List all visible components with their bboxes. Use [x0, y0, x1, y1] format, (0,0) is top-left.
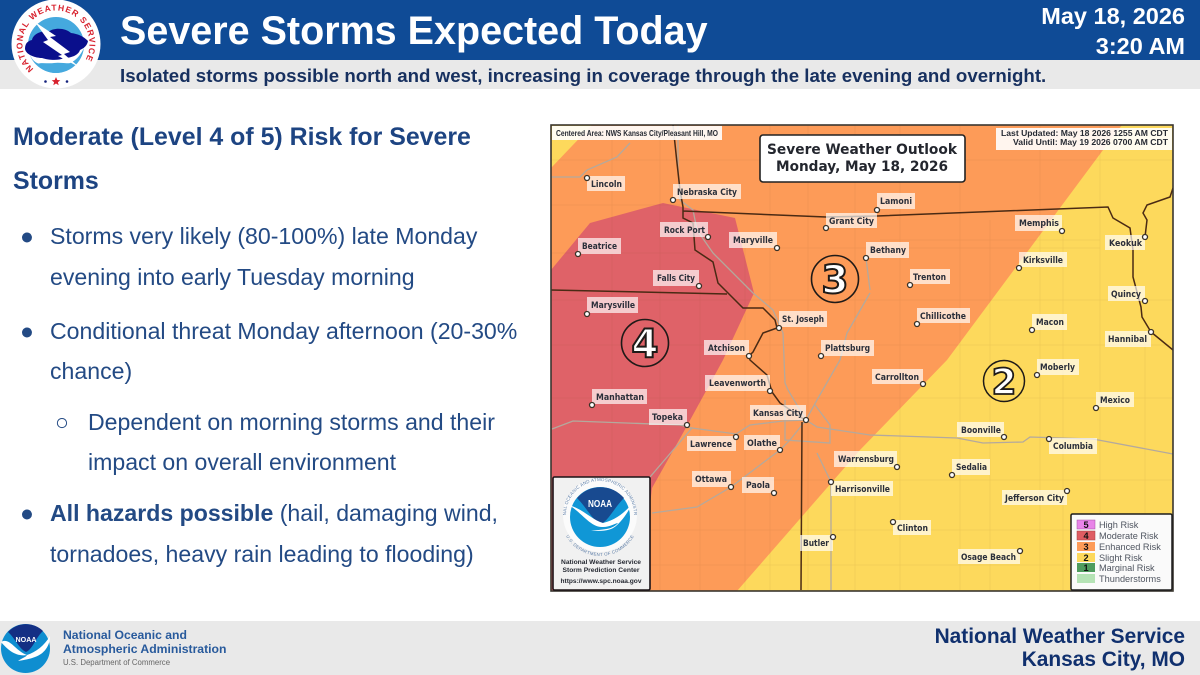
- city: Columbia: Columbia: [1053, 441, 1093, 452]
- NOAA panel on map: https://www.spc.noaa.gov: [560, 579, 642, 585]
- risk number 3: [812, 256, 858, 303]
- city: Memphis: Memphis: [1019, 218, 1059, 229]
- legend: Moderate Risk: [1099, 531, 1159, 541]
- legend: 1: [1083, 563, 1089, 573]
- bullet: conditional threat: [20, 318, 517, 384]
- bullet: storms likely: [20, 223, 478, 290]
- city: Plattsburg: [818, 340, 874, 358]
- bullet: storms likely: Storms very likely (80-100%) late Monday: [50, 223, 477, 249]
- city: Mexico: Mexico: [1100, 395, 1130, 406]
- city: Carrollton: Carrollton: [875, 372, 919, 383]
- city: Topeka: Topeka: [652, 412, 683, 423]
- NOAA panel on map: Storm Prediction Center: [562, 568, 640, 574]
- city: Falls City: [653, 270, 702, 288]
- legend: Marginal Risk: [1099, 563, 1155, 573]
- legend: 3: [1083, 542, 1089, 552]
- footer band: [0, 621, 1200, 675]
- city: Leavenworth: Leavenworth: [709, 378, 766, 389]
- city: Kirksville: [1016, 252, 1067, 270]
- city: Paola: [742, 477, 776, 496]
- icon: NOAA footer logo: [1, 624, 50, 673]
- map: severe weather outlook: [550, 124, 1174, 592]
- bullet: storms likely: ●: [20, 223, 34, 249]
- city: St. Joseph: [776, 311, 827, 330]
- NOAA panel on map: National Weather Service: [561, 560, 642, 566]
- yellow slight risk area NW: [551, 125, 592, 168]
- header band: [0, 0, 1200, 60]
- city: Quincy: Quincy: [1111, 289, 1141, 300]
- city: Olathe: Olathe: [747, 438, 777, 449]
- subtitle: Isolated storms possible north and west, increasing in coverage through the late evening and overnight.: [120, 65, 1046, 86]
- city: Keokuk: [1105, 234, 1148, 250]
- bullet: conditional threat: Conditional threat Monday afternoon (20-30%: [50, 318, 517, 344]
- city: Leavenworth: [705, 375, 772, 394]
- city: Beatrice: Beatrice: [582, 241, 617, 252]
- NOAA panel on map: NATIONAL OCEANIC AND ATMOSPHERIC ADMINISTRATION: [563, 478, 637, 515]
- NOAA panel on map: NOAA: [588, 499, 612, 510]
- bullet: conditional threat: ●: [20, 318, 34, 344]
- city: Memphis: [1015, 215, 1064, 234]
- city: Jefferson City: [1002, 488, 1070, 505]
- NOAA panel on map: [552, 476, 651, 591]
- date and time: May 18, 2026: [1041, 3, 1185, 29]
- date and time: [1041, 3, 1185, 59]
- NOAA wordmark: Atmospheric Administration: [63, 642, 226, 656]
- map title box: Severe Weather Outlook: [767, 142, 957, 158]
- city: Ottawa: [692, 471, 734, 490]
- city: Lawrence: [687, 434, 738, 451]
- city: Quincy: [1108, 286, 1148, 304]
- city: Marysville: Marysville: [591, 300, 635, 311]
- office name: National Weather Service: [935, 625, 1185, 648]
- city: Carrollton: [872, 369, 926, 386]
- label: centered area: Centered Area: NWS Kansas City/Pleasant Hill, MO: [556, 129, 718, 138]
- NOAA wordmark: [63, 628, 226, 667]
- city: Plattsburg: Plattsburg: [825, 343, 870, 354]
- bullet: all hazards: [20, 500, 498, 567]
- date and time: 3:20 AM: [1096, 33, 1185, 59]
- bullet: all hazards: tornadoes, heavy rain leading to flooding): [50, 541, 474, 567]
- risk number 2: [984, 360, 1024, 403]
- label: update times: [996, 128, 1172, 150]
- city: Marysville: [584, 297, 638, 316]
- city: Bethany: Bethany: [870, 245, 906, 256]
- office name: [935, 625, 1185, 671]
- slight risk area: [737, 125, 1173, 591]
- risk number 2: 2: [991, 362, 1017, 403]
- risk number 4: 4: [631, 322, 659, 367]
- city: Grant City: [824, 213, 877, 230]
- heading second line: Storms: [13, 167, 99, 195]
- city: Nebraska City: Nebraska City: [677, 187, 737, 198]
- city: Atchison: Atchison: [708, 343, 745, 354]
- sub-bullet: dependent: Dependent on morning storms and their: [88, 409, 495, 435]
- legend: 4: [1083, 531, 1089, 541]
- city: Osage Beach: [958, 548, 1022, 564]
- city: Hannibal: Hannibal: [1108, 334, 1147, 345]
- city: Moberly: [1034, 359, 1079, 378]
- city: Macon: [1030, 314, 1067, 332]
- city: St. Joseph: St. Joseph: [782, 314, 824, 325]
- city: Macon: Macon: [1036, 317, 1064, 328]
- city: Chillicothe: Chillicothe: [920, 311, 966, 322]
- city: Kansas City: [750, 405, 808, 422]
- city: Mexico: [1094, 392, 1134, 410]
- legend: [1071, 514, 1172, 590]
- city: Jefferson City: Jefferson City: [1004, 493, 1064, 504]
- legend: Slight Risk: [1099, 553, 1143, 563]
- city: Trenton: [908, 269, 950, 288]
- sub-bullet: dependent: ○: [55, 409, 69, 435]
- city: Boonville: Boonville: [961, 425, 1001, 436]
- NOAA wordmark: National Oceanic and: [63, 628, 187, 642]
- label: update times: Last Updated: May 18 2026 1255 AM CDT: [1001, 129, 1168, 138]
- city: Maryville: Maryville: [733, 235, 773, 246]
- legend: Thunderstorms: [1099, 574, 1161, 584]
- state borders: [551, 125, 1173, 590]
- city: Sedalia: Sedalia: [956, 462, 987, 473]
- bullet: all hazards: All hazards possible (hail, damaging wind,: [50, 500, 498, 526]
- city: Lincoln: Lincoln: [591, 179, 622, 190]
- city: Grant City: Grant City: [829, 216, 874, 227]
- map title box: Monday, May 18, 2026: [776, 159, 948, 175]
- sub-bullet: dependent: [55, 409, 495, 475]
- moderate risk area: [551, 203, 754, 591]
- city: Hannibal: [1105, 330, 1154, 347]
- city: Osage Beach: Osage Beach: [961, 552, 1016, 563]
- city: Boonville: [957, 422, 1006, 440]
- city: Warrensburg: Warrensburg: [838, 454, 894, 465]
- legend: High Risk: [1099, 520, 1139, 530]
- legend: 5: [1083, 520, 1089, 530]
- city: Warrensburg: [834, 451, 900, 470]
- city: Moberly: Moberly: [1040, 362, 1075, 373]
- label: centered area: [552, 126, 722, 140]
- title: Severe Storms Expected Today: [120, 9, 708, 53]
- label: update times: Valid Until: May 19 2026 0700 AM CDT: [1013, 138, 1168, 147]
- risk number 4: [622, 320, 668, 367]
- risk number 3: 3: [821, 258, 849, 303]
- legend: 2: [1083, 553, 1089, 563]
- bullet: storms likely: evening into early Tuesday morning: [50, 264, 415, 290]
- city: Topeka: [649, 409, 690, 428]
- office name: Kansas City, MO: [1022, 648, 1185, 671]
- subtitle band: [0, 60, 1200, 89]
- city: Atchison: [704, 340, 752, 358]
- icon: NOAA footer logo: NOAA: [16, 635, 37, 644]
- city: Kansas City: Kansas City: [753, 408, 803, 419]
- city: Trenton: Trenton: [913, 272, 946, 283]
- city: Lincoln: [584, 176, 625, 191]
- city: Lamoni: [874, 193, 915, 212]
- city: Manhattan: Manhattan: [596, 392, 644, 403]
- city: Sedalia: [950, 459, 990, 478]
- city: Beatrice: [576, 238, 621, 256]
- text block: risk details: [13, 123, 517, 567]
- bullet: all hazards: ●: [20, 500, 34, 526]
- bullet: conditional threat: chance): [50, 358, 132, 384]
- city: Rock Port: [660, 222, 710, 240]
- icon: NWS logo: NATIONAL WEATHER SERVICE: [16, 4, 96, 73]
- sub-bullet: dependent: impact on overall environment: [88, 449, 396, 475]
- city: Ottawa: Ottawa: [695, 474, 727, 485]
- city: Kirksville: Kirksville: [1023, 255, 1063, 266]
- city: Manhattan: [590, 389, 647, 408]
- highways: [551, 125, 1173, 590]
- city: Butler: Butler: [803, 538, 829, 549]
- city: Clinton: Clinton: [897, 523, 928, 534]
- city: Chillicothe: [914, 308, 970, 326]
- city: Butler: [800, 534, 836, 551]
- city: Keokuk: Keokuk: [1109, 238, 1143, 249]
- map title box: [760, 135, 965, 182]
- city: Rock Port: Rock Port: [664, 225, 705, 236]
- heading: Moderate (Level 4 of 5) Risk for Severe: [13, 123, 471, 151]
- NOAA wordmark: U.S. Department of Commerce: [63, 658, 170, 667]
- county lines: [551, 125, 1173, 590]
- city: Maryville: [729, 232, 780, 250]
- city: Nebraska City: [670, 184, 741, 202]
- city: Lamoni: Lamoni: [880, 196, 912, 207]
- city: Harrisonville: [828, 480, 893, 496]
- legend: Enhanced Risk: [1099, 542, 1161, 552]
- city: Lawrence: Lawrence: [690, 439, 732, 450]
- city: Bethany: [864, 242, 909, 260]
- NOAA panel on map: U.S. DEPARTMENT OF COMMERCE: [566, 534, 634, 556]
- city: Harrisonville: Harrisonville: [835, 484, 890, 495]
- city: Paola: Paola: [746, 480, 770, 491]
- city: Olathe: [744, 435, 782, 452]
- city: Falls City: Falls City: [657, 273, 695, 284]
- city: Clinton: [890, 520, 931, 535]
- city: Columbia: [1046, 436, 1097, 454]
